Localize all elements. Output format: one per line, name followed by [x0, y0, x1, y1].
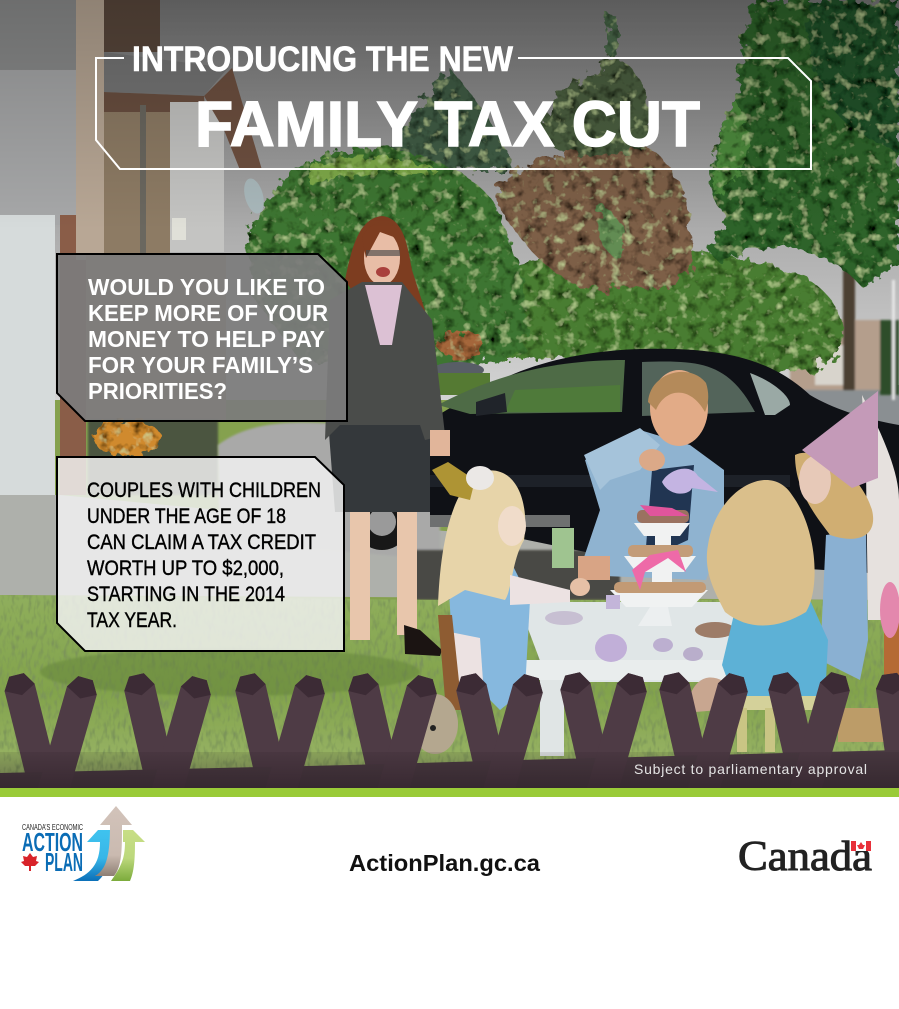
teapot	[662, 469, 718, 494]
title frame	[96, 58, 811, 169]
dark conifer	[385, 68, 512, 170]
silver car	[218, 422, 440, 560]
action plan logo	[21, 806, 145, 881]
girl with crown	[432, 462, 590, 710]
green chair back	[552, 528, 574, 568]
right hedge	[490, 249, 842, 372]
teddy bear	[412, 694, 458, 754]
logo PLAN: PLAN	[45, 847, 83, 877]
eligibility text: TAX YEAR.	[87, 609, 177, 632]
callout: eligibility	[57, 457, 344, 651]
disclaimer: Subject to parliamentary approval	[634, 761, 867, 777]
pink hat girl	[795, 391, 878, 680]
brown tree	[497, 15, 692, 290]
tea set	[545, 595, 735, 662]
table	[518, 602, 787, 756]
brick wall lower	[86, 255, 226, 420]
satellite dish	[241, 176, 267, 216]
distant houses	[790, 270, 899, 400]
question text: WOULD YOU LIKE TO	[88, 274, 325, 300]
blue arrow	[73, 830, 112, 881]
house	[0, 0, 267, 495]
green arrow	[111, 830, 145, 881]
leafy tree top right	[710, 0, 899, 285]
small car	[432, 362, 484, 378]
black car	[430, 349, 899, 575]
icon: maple leaf	[21, 853, 39, 871]
orange shrub	[438, 331, 486, 359]
driveway	[0, 495, 899, 600]
logo ACTION: ACTION	[22, 827, 83, 857]
website: ActionPlan.gc.ca	[349, 850, 541, 876]
fence front posts	[35, 670, 853, 807]
question text: MONEY TO HELP PAY	[88, 326, 325, 352]
bottom shading	[0, 752, 899, 790]
hedge sunlit top	[310, 156, 440, 185]
title line 2: FAMILY TAX CUT	[195, 88, 700, 160]
eligibility text: CAN CLAIM A TAX CREDIT	[87, 531, 316, 554]
icon: flag	[851, 841, 871, 851]
question text: KEEP MORE OF YOUR	[88, 300, 328, 326]
green footer bar	[0, 788, 899, 797]
road shadow	[400, 550, 620, 600]
logo small text: CANADA’S ECONOMIC	[22, 823, 83, 832]
roof	[104, 52, 228, 96]
lawn	[0, 595, 899, 790]
fence back posts	[1, 670, 899, 805]
cake stand	[610, 505, 708, 626]
top shading	[0, 0, 899, 230]
eligibility text: STARTING IN THE 2014	[87, 583, 285, 606]
callout: question	[57, 254, 347, 421]
veil	[862, 395, 899, 620]
canada wordmark: Canada	[738, 834, 872, 880]
girl from behind	[690, 480, 828, 712]
flowers	[93, 420, 161, 456]
man	[578, 370, 724, 580]
distant street	[780, 385, 899, 435]
sky	[0, 0, 899, 400]
eligibility text: UNDER THE AGE OF 18	[87, 505, 286, 528]
question text: FOR YOUR FAMILY’S	[88, 352, 313, 378]
white footer	[0, 797, 899, 1009]
chair right	[737, 582, 899, 752]
eligibility text: COUPLES WITH CHILDREN	[87, 479, 321, 502]
woman	[325, 216, 450, 656]
beige arrow	[95, 806, 132, 876]
question text: PRIORITIES?	[88, 378, 227, 404]
fence rail	[0, 750, 899, 790]
big hedge	[245, 148, 528, 375]
chair left	[438, 615, 462, 710]
eligibility text: WORTH UP TO $2,000,	[87, 557, 284, 580]
brown tree trunks	[555, 270, 598, 350]
title line 1: INTRODUCING THE NEW	[132, 40, 513, 79]
